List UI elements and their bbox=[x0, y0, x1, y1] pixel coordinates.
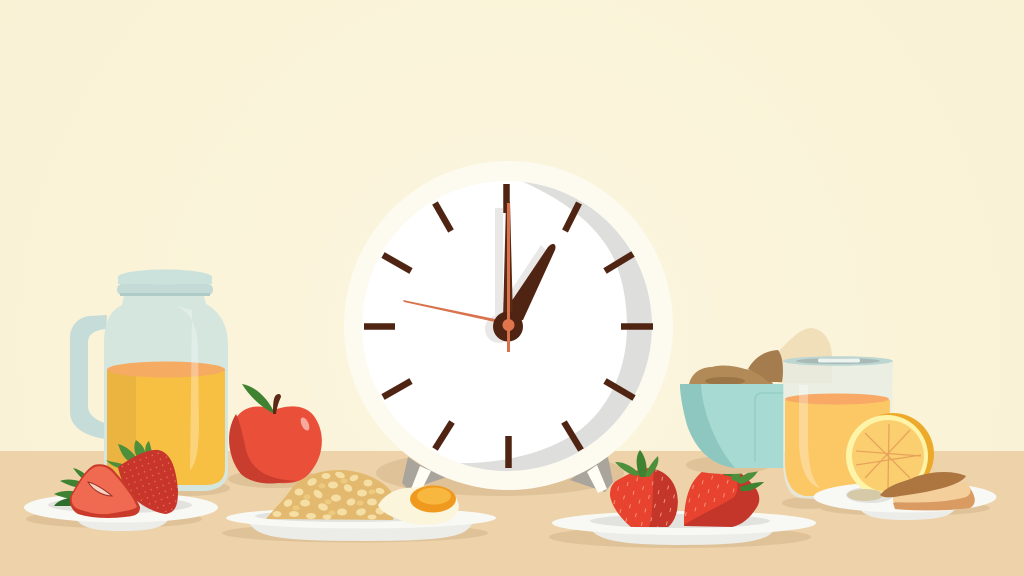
plate base bbox=[590, 528, 775, 545]
plate rim bbox=[814, 482, 996, 512]
minute hand bbox=[503, 202, 513, 320]
right plate with lemon and toast bbox=[814, 413, 996, 520]
mint bowl with nuts bbox=[680, 328, 832, 474]
hub cap bbox=[502, 319, 514, 331]
center plate with oats and egg bbox=[222, 470, 496, 542]
juice surface bbox=[107, 362, 225, 378]
juice jar bbox=[70, 270, 230, 496]
pale background blob bbox=[778, 328, 832, 383]
bowl shade bbox=[680, 384, 735, 468]
bowl inner line bbox=[755, 393, 784, 462]
plate shadow bbox=[26, 510, 202, 528]
juice glass bbox=[782, 356, 893, 509]
table top bbox=[0, 451, 1024, 576]
clock bbox=[344, 161, 673, 496]
hour ticks bbox=[364, 184, 653, 468]
juice bbox=[107, 370, 225, 485]
cut strawberry leaves bbox=[54, 467, 93, 506]
plate shadow bbox=[820, 500, 990, 516]
apple shadow bbox=[228, 470, 322, 488]
apple stem bbox=[273, 394, 281, 414]
jar body bbox=[104, 296, 228, 491]
plate rim bbox=[24, 492, 218, 522]
left plate with strawberries bbox=[24, 440, 218, 531]
bowl shadow bbox=[686, 456, 770, 474]
lemon slice bbox=[846, 413, 934, 497]
apple leaf bbox=[242, 384, 275, 414]
cut strawberry bbox=[70, 464, 140, 518]
left clock leg bbox=[402, 457, 447, 491]
plate base bbox=[860, 509, 955, 520]
apple highlight bbox=[299, 416, 311, 432]
glass highlight bbox=[799, 385, 820, 488]
clock case bbox=[344, 161, 673, 490]
glass shadow bbox=[782, 497, 834, 509]
toast bbox=[880, 472, 975, 510]
strawberry one bbox=[610, 450, 678, 527]
plate rim bbox=[552, 511, 816, 535]
glass highlight bbox=[176, 306, 199, 470]
apple shade bbox=[229, 414, 298, 483]
jar handle bbox=[70, 315, 107, 439]
nuts bbox=[689, 350, 783, 385]
juice shaded band bbox=[107, 370, 136, 485]
strawberry two leaves bbox=[723, 445, 764, 491]
plate shadow bbox=[549, 526, 811, 548]
glass rim bbox=[783, 356, 893, 366]
clock table shadow bbox=[376, 450, 624, 496]
plate base bbox=[250, 524, 472, 541]
juice bbox=[785, 400, 890, 496]
apple bbox=[228, 384, 322, 488]
hour hand bbox=[510, 244, 556, 322]
whole strawberry leaves bbox=[106, 440, 152, 469]
clock face shadow crescent bbox=[460, 182, 652, 471]
plate base bbox=[75, 517, 170, 531]
strawberry one leaves bbox=[615, 450, 658, 477]
hand shadows bbox=[485, 208, 546, 343]
plate shadow bbox=[222, 524, 488, 542]
glass body bbox=[783, 362, 893, 499]
strawberry core bbox=[88, 482, 112, 496]
fried egg bbox=[378, 486, 459, 525]
clock face bbox=[362, 181, 652, 471]
right clock leg bbox=[570, 457, 613, 493]
whole strawberry bbox=[118, 450, 178, 514]
bowl body bbox=[680, 384, 784, 468]
hub bbox=[493, 312, 523, 342]
egg yolk bbox=[410, 486, 456, 512]
plate rim bbox=[226, 508, 496, 528]
strawberry two bbox=[684, 445, 764, 527]
right plate with strawberries bbox=[549, 445, 816, 548]
oat scraps bbox=[847, 489, 883, 501]
orange hand vertical bbox=[507, 203, 510, 352]
second hand long bbox=[403, 300, 495, 322]
background wall bbox=[0, 0, 1024, 452]
jar lid bbox=[117, 270, 213, 296]
jar shadow bbox=[146, 480, 230, 496]
apple body bbox=[230, 406, 322, 483]
oat pile bbox=[266, 470, 395, 520]
